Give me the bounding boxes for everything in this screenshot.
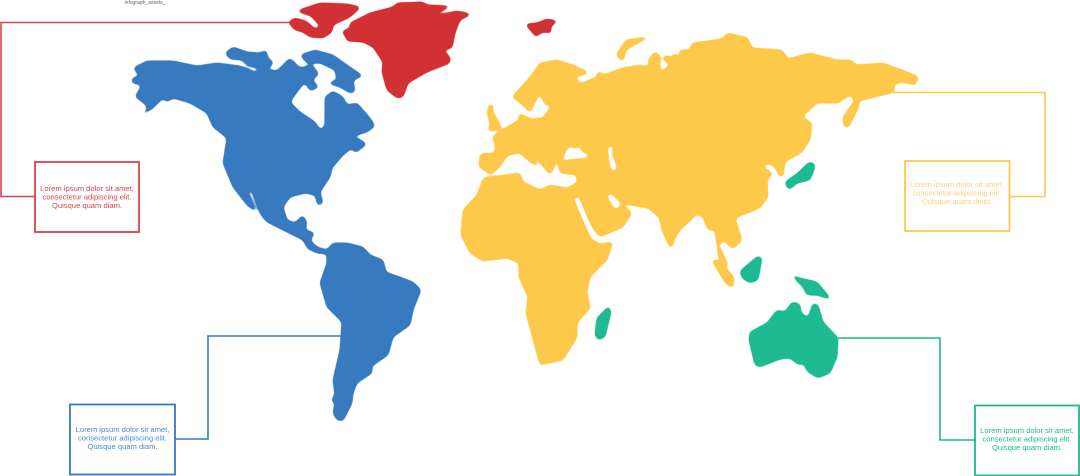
novaya zemlya xyxy=(616,36,652,62)
callout: yellow xyxy=(905,161,1010,231)
callout: teal xyxy=(975,406,1079,476)
top asset label: infograph_assets_ xyxy=(125,0,166,6)
new guinea xyxy=(790,274,832,300)
afro-eurasia landmass xyxy=(461,33,919,365)
callout: teal: consectetur adipiscing elit. xyxy=(982,434,1072,444)
callout: yellow: consectetur adipiscing elit. xyxy=(912,188,1002,198)
japan xyxy=(785,162,815,190)
leader line: red xyxy=(1,22,292,196)
borneo xyxy=(740,256,762,283)
victoria island xyxy=(225,47,274,68)
map: north and south america xyxy=(132,47,421,421)
callout: red: Quisque quam diam. xyxy=(52,201,122,210)
australia xyxy=(749,302,838,378)
callout: red xyxy=(35,162,139,232)
north america and south america landmass xyxy=(132,58,421,421)
leader line: teal xyxy=(838,338,975,440)
leader line: blue xyxy=(175,336,343,439)
callout: yellow: Lorem ipsum dolor sit amet, xyxy=(910,180,1004,189)
ellesmere island xyxy=(288,3,361,38)
map: europe asia africa xyxy=(461,33,919,365)
great britain xyxy=(487,103,502,132)
callout: teal: Quisque quam diam. xyxy=(992,443,1062,452)
map: greenland and arctic xyxy=(288,2,558,98)
greenland xyxy=(341,2,472,98)
callout: blue xyxy=(70,404,175,474)
map: oceania and islands xyxy=(595,162,838,378)
callout: red: Lorem ipsum dolor sit amet, xyxy=(40,184,134,193)
madagascar xyxy=(595,306,611,340)
callout: blue: Lorem ipsum dolor sit amet, xyxy=(76,425,169,434)
iceland xyxy=(525,19,558,37)
callout: blue: consectetur adipiscing elit. xyxy=(78,434,167,442)
callout: red: consectetur adipiscing elit. xyxy=(42,192,132,202)
leader line: yellow xyxy=(893,92,1045,196)
callout: teal: Lorem ipsum dolor sit amet, xyxy=(980,426,1074,435)
callout: blue: Quisque quam diam. xyxy=(87,442,158,451)
sumatra xyxy=(711,259,734,288)
callout: yellow: Quisque quam diam. xyxy=(922,197,992,206)
baffin island xyxy=(300,50,363,93)
